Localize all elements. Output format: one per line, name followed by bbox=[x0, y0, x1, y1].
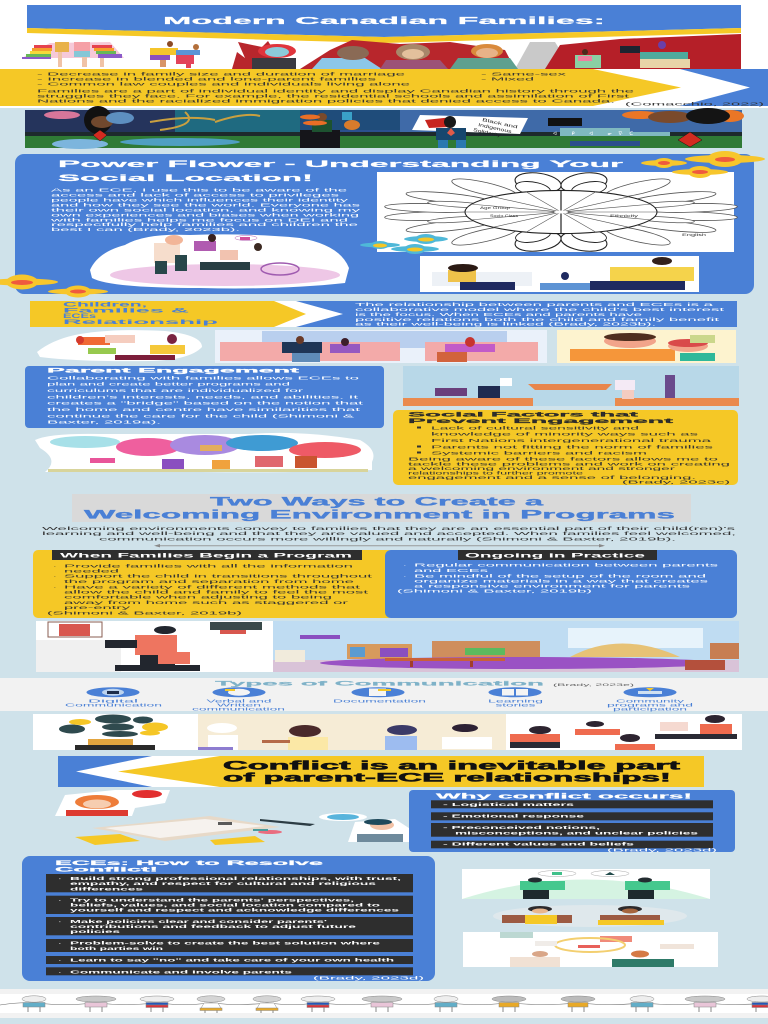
text: social location reflection: As an ECE, I use this to be aware of the bbox=[51, 188, 348, 194]
panel: Why conflict occurs bbox=[409, 790, 735, 854]
panel: When Families Begin a Program: - bbox=[54, 564, 56, 569]
panel: How to Resolve Conflict: both parties win bbox=[70, 946, 163, 952]
heading: Power Flower: Social Location! bbox=[58, 173, 313, 184]
banner: family trends and history: - Common law couples and individuals living alone bbox=[37, 82, 411, 88]
panel: When Families Begin a Program: Support the child in transitions throughout bbox=[64, 574, 374, 580]
heading: Types of Communication: Types of Communication bbox=[215, 681, 544, 688]
panel: Why conflict occurs: (Brady, 2023d) bbox=[607, 848, 718, 854]
heading: Two Ways to Create a Welcoming Environment: Two Ways to Create a bbox=[210, 496, 545, 508]
panel: Social Factors: Lack of cultural sensitivity and bbox=[431, 425, 640, 431]
icon: yellow flowers top right bbox=[641, 151, 765, 178]
panel: When Families Begin a Program: When Families Begin a Program bbox=[60, 552, 353, 560]
panel: Social Factors: Social Factors that bbox=[408, 411, 641, 418]
panel: Parent Engagement: Collaborating with families allows ECEs to bbox=[47, 375, 360, 381]
panel: Social Factors: Systemic barriers and racism bbox=[431, 450, 647, 456]
panel: Ongoing in Practice: Regular communication between parents bbox=[414, 563, 720, 569]
illustration: two people with puzzle pieces bbox=[493, 905, 687, 927]
illustration: group collaboration bbox=[506, 714, 742, 750]
panel: Parent Engagement: children's interests, needs, and abilities. It bbox=[47, 394, 360, 400]
banner: Children, Families & ECEs Relationship: The relationship between parents and ECEs is a bbox=[355, 302, 714, 308]
panel: When Families Begin a Program bbox=[33, 550, 393, 618]
banner: family trends and history: - Mixed bbox=[481, 76, 535, 82]
banner: Children, Families & ECEs Relationship: Families & bbox=[63, 308, 192, 314]
panel: Parent Engagement: curriculums that are individualized for bbox=[47, 388, 304, 394]
text: welcoming environments intro: communication occurs more willingly and naturally (Shimoni & Baxter, 2019b). bbox=[99, 536, 676, 542]
panel: Why conflict occurs: - Preconceived notions, bbox=[443, 825, 602, 831]
panel: How to Resolve Conflict: - bbox=[59, 877, 61, 882]
illustration: diverse Canadian families bbox=[22, 34, 741, 69]
icon: verbal and written: communication bbox=[192, 706, 287, 711]
title banner bbox=[27, 5, 741, 43]
panel: Types of Communication bbox=[0, 678, 768, 711]
illustration: bridge building bbox=[403, 366, 739, 406]
panel: How to Resolve Conflict: - bbox=[59, 920, 61, 925]
icon: verbal and written: Verbal and bbox=[206, 699, 274, 704]
panel: Ongoing in Practice: - bbox=[404, 574, 406, 579]
panel: When Families Begin a Program: Have a variety of different methods that bbox=[64, 584, 362, 590]
panel: Ongoing in Practice: a responsive environment for parents bbox=[414, 584, 692, 590]
panel: Why conflict occurs: - Emotional response bbox=[443, 814, 585, 820]
panel: Ongoing in Practice: and ECEs bbox=[414, 568, 490, 574]
panel: Why conflict occurs: - Logistical matters bbox=[443, 802, 575, 808]
illustration: Indigenous art mural: Indigenous bbox=[478, 122, 513, 134]
panel: Social Factors: engagement and a sense of belonging. bbox=[408, 475, 696, 481]
illustration: two colleagues talking bbox=[462, 869, 710, 899]
banner: family trends and history: struggles they face. For example, the residential schools and assimilation of First bbox=[37, 94, 631, 100]
panel: How to Resolve Conflict: contributions and feedback to adjust future bbox=[70, 924, 357, 930]
arrow: double-headed divider bbox=[154, 544, 605, 547]
panel: Parent Engagement: Baxter, 2019a). bbox=[47, 420, 161, 426]
panel: Why conflict occurs: misconceptions, and unclear policies bbox=[455, 830, 699, 836]
panel: How to Resolve Conflict: Make policies clear and consider parents' bbox=[70, 919, 327, 925]
heading: Types of Communication bbox=[215, 681, 636, 688]
illustration: family meeting on sofas bbox=[215, 330, 547, 363]
panel: Parent Engagement: the home and centre have similarities that bbox=[47, 407, 362, 413]
banner: Children, Families & ECEs Relationship: as their well-being is linked (Brady, 2023b). bbox=[355, 322, 656, 328]
panel: Parent Engagement: creates a "bridge" based on the notion that bbox=[47, 401, 365, 407]
panel: When Families Begin a Program: (Shimoni & Baxter, 2019b) bbox=[47, 610, 243, 616]
panel: How to Resolve Conflict: - bbox=[59, 959, 61, 964]
banner: Conflict is inevitable: of parent-ECE relationships! bbox=[223, 773, 671, 785]
panel: How to Resolve Conflict: - bbox=[59, 942, 61, 947]
title banner: Modern Canadian Families: bbox=[163, 15, 605, 27]
panel: Social Factors: Being aware of these factors allows me to bbox=[408, 456, 719, 462]
text: social location reflection: own experiences and biases when working bbox=[51, 212, 360, 218]
banner: Children, Families & ECEs Relationship: Relationship bbox=[63, 320, 219, 326]
panel: How to Resolve Conflict bbox=[22, 856, 435, 982]
heading: Two Ways to Create a Welcoming Environment: Welcoming Environment in Programs bbox=[84, 510, 675, 522]
icon: digital communication: Digital bbox=[88, 699, 138, 704]
illustration: row of children holding hands bbox=[0, 989, 768, 1018]
panel: When Families Begin a Program: allow the child and family to feel the most bbox=[64, 590, 370, 596]
panel: How to Resolve Conflict: yourself and respect and acknowledge differences bbox=[70, 908, 400, 914]
panel: Social Factors: relationships to further promote bbox=[408, 470, 584, 476]
text: welcoming environments intro bbox=[42, 526, 737, 542]
icon: verbal and written bbox=[192, 687, 287, 711]
panel: Ongoing in Practice: Be mindful of the setup of the room and bbox=[414, 573, 707, 579]
icon: documentation: Documentation bbox=[333, 699, 428, 704]
panel: Ongoing in Practice: (Shimoni & Baxter, 2019b) bbox=[397, 589, 593, 595]
banner: family trends and history: - Same-sex bbox=[481, 72, 568, 78]
illustration: parents with child on floor bbox=[420, 256, 699, 292]
panel: How to Resolve Conflict: ECEs: How to Resolve bbox=[55, 861, 326, 867]
illustration: family with wheelchair bbox=[90, 234, 349, 288]
panel: When Families Begin a Program: comfortable when adjusting to being bbox=[64, 595, 333, 601]
panel: How to Resolve Conflict: Try to understand the parents' perspectives, bbox=[70, 897, 356, 903]
illustration: social media bbox=[33, 714, 198, 750]
text: social location reflection: best I can (Brady, 2023b). bbox=[51, 227, 240, 233]
panel: Ongoing in Practice: Ongoing in Practice bbox=[465, 552, 646, 560]
panel: How to Resolve Conflict: empathy, and respect for cultural and religious bbox=[70, 881, 377, 887]
illustration: parents and children playing bbox=[37, 330, 202, 361]
chart: power flower diagram: Socio Class bbox=[490, 213, 518, 218]
panel: Social Factors: Prevent Engagement bbox=[408, 418, 676, 425]
icon: blue flowers bbox=[360, 234, 448, 254]
illustration: desk with calendar bbox=[75, 816, 315, 845]
panel: Social Factors: tackle these problems and work on creating bbox=[408, 461, 731, 467]
panel: How to Resolve Conflict: Communicate and involve parents bbox=[70, 969, 293, 975]
banner: Children, Families & ECEs Relationship bbox=[30, 301, 737, 328]
banner: family trends and history bbox=[0, 69, 768, 108]
panel: When Families Begin a Program: Provide families with all the information bbox=[64, 563, 354, 569]
icon: digital communication bbox=[65, 687, 164, 708]
illustration: Indigenous art mural: Black and bbox=[482, 117, 519, 130]
icon: learning stories: Learning bbox=[488, 699, 545, 704]
icon: learning stories: stories bbox=[496, 702, 536, 708]
icon: yellow flowers bottom left bbox=[0, 274, 108, 298]
text: social location reflection: their own social location, and knowing my bbox=[51, 208, 362, 214]
panel: How to Resolve Conflict: beliefs, values, and social location compared to bbox=[70, 902, 380, 908]
chart: power flower diagram: English bbox=[682, 232, 706, 237]
panel: How to Resolve Conflict: (Brady, 2023d) bbox=[313, 976, 425, 982]
panel: Parent Engagement: Parent Engagement bbox=[47, 369, 299, 375]
panel: How to Resolve Conflict: differences bbox=[70, 886, 144, 892]
banner: Conflict is inevitable bbox=[58, 756, 704, 787]
illustration: children's dream clouds bbox=[35, 433, 374, 472]
banner: family trends and history: - Decrease in family size and duration of marriage bbox=[37, 72, 406, 78]
panel: Ongoing in Practice: organize materials in a way that creates bbox=[414, 579, 710, 585]
banner: family trends and history: Nations and the racialized immigration policies that denied access to Canada. bbox=[37, 99, 615, 105]
chart: power flower diagram bbox=[377, 172, 740, 252]
panel: Ongoing in Practice: - bbox=[404, 564, 406, 569]
banner: Children, Families & ECEs Relationship: collaborative model where the child's best interest bbox=[355, 307, 726, 313]
panel: How to Resolve Conflict: - bbox=[59, 970, 61, 975]
text: welcoming environments intro: Welcoming environments convey to families that they are an essential part of their child(ren)'s bbox=[42, 526, 737, 532]
illustration: parent and children reading bbox=[557, 330, 736, 363]
banner: family trends and history: - Increase in blended and lone-parent families bbox=[37, 76, 378, 82]
illustration: mother and child walking bbox=[36, 621, 273, 672]
banner: Children, Families & ECEs Relationship: positive relations both the child and family benefit bbox=[355, 317, 721, 323]
icon: community programs: Community bbox=[616, 699, 687, 704]
panel: How to Resolve Conflict: Build strong professional relationships, with trust, bbox=[70, 876, 403, 882]
panel: Parent Engagement bbox=[25, 366, 384, 428]
illustration: Indigenous art mural bbox=[25, 106, 744, 149]
text: social location reflection: people have which influences their identity bbox=[51, 198, 350, 204]
illustration: feedback exchange bbox=[463, 932, 718, 967]
banner: Children, Families & ECEs Relationship: is the focus. When ECEs and parents have bbox=[355, 312, 643, 318]
illustration: upset woman bbox=[55, 790, 170, 816]
panel: Ongoing in Practice bbox=[385, 550, 737, 618]
text: social location reflection: and how they see the world. Everyone has bbox=[51, 202, 362, 208]
icon: verbal and written: Written bbox=[217, 702, 263, 708]
heading: Types of Communication: (Brady, 2023e) bbox=[553, 682, 636, 687]
panel: Parent Engagement: plan and create better programs and bbox=[47, 382, 291, 388]
panel: Social Factors: Parents not fitting the norm of families bbox=[431, 444, 715, 450]
text: social location reflection bbox=[51, 188, 362, 233]
illustration: people talking bbox=[198, 714, 506, 750]
panel: Power Flower bbox=[0, 151, 765, 298]
panel: How to Resolve Conflict: policies bbox=[70, 929, 121, 935]
panel: How to Resolve Conflict: - bbox=[59, 898, 61, 903]
panel: When Families Begin a Program: the program and separation from home bbox=[64, 579, 355, 585]
banner: Conflict is inevitable: Conflict is an inevitable part bbox=[223, 760, 680, 772]
heading: Power Flower: Power Flower - Understanding Your bbox=[58, 159, 624, 170]
panel: Social Factors: knowledge of minority ways such as bbox=[431, 431, 700, 437]
icon: community programs: programs and bbox=[607, 702, 695, 708]
panel: Parent Engagement: continue the care for the child (Shimoni & bbox=[47, 413, 357, 419]
banner: family trends and history: Families are a part of individual identity and display Canadian history through the bbox=[37, 89, 635, 95]
heading: Two Ways to Create a Welcoming Environment bbox=[72, 494, 691, 522]
panel: Why conflict occurs: Why conflict occurs! bbox=[436, 793, 692, 800]
text: social location reflection: respectfully help families and children the bbox=[51, 222, 359, 228]
icon: community programs: participation bbox=[613, 706, 689, 711]
panel: Social Factors: (Brady, 2023c) bbox=[622, 479, 731, 485]
panel: Social Factors: a welcoming environment and stronger bbox=[408, 466, 676, 472]
illustration: Indigenous art mural: ᐊ ᑭ ᐊ ᓂᐍᑕ bbox=[553, 131, 633, 137]
text: social location reflection: access and lack of access to privileges bbox=[51, 192, 341, 198]
panel: How to Resolve Conflict: Learn to say "no" and take care of your own health bbox=[70, 958, 394, 964]
panel: When Families Begin a Program: - bbox=[54, 585, 56, 590]
text: social location reflection: with families helps me focus on DEI and bbox=[51, 217, 349, 223]
illustration: classroom bbox=[273, 621, 739, 672]
panel: Social Factors: First Nations intergenerational trauma bbox=[431, 438, 712, 444]
banner: Children, Families & ECEs Relationship: Children, bbox=[63, 303, 148, 309]
icon: learning stories bbox=[488, 687, 545, 708]
panel: Social Factors bbox=[393, 410, 738, 485]
illustration: upset boy bbox=[319, 813, 418, 842]
banner: family trends and history: (Comacchio, 2022) bbox=[625, 102, 765, 108]
heading: Power Flower bbox=[58, 159, 624, 184]
panel: How to Resolve Conflict: Conflict! bbox=[55, 868, 158, 874]
panel: When Families Begin a Program: away from home such as staggered or bbox=[64, 600, 349, 606]
panel: When Families Begin a Program: pre-entry bbox=[64, 605, 132, 611]
icon: community programs bbox=[607, 687, 695, 711]
panel: When Families Begin a Program: needed bbox=[64, 568, 120, 574]
text: welcoming environments intro: learning and well-being and that they are valued and accepted. When families feel welcomed, bbox=[42, 531, 736, 537]
illustration: Indigenous art mural: Solidarity bbox=[473, 127, 502, 138]
chart: power flower diagram: Ethnicity bbox=[610, 213, 638, 218]
banner: Children, Families & ECEs Relationship: ECEs bbox=[63, 314, 97, 320]
icon: digital communication: Communication bbox=[65, 702, 164, 708]
icon: documentation bbox=[333, 687, 428, 704]
panel: How to Resolve Conflict: Problem-solve to create the best solution where bbox=[70, 941, 381, 947]
panel: When Families Begin a Program: - bbox=[54, 575, 56, 580]
chart: power flower diagram: Age Group bbox=[480, 205, 511, 210]
panel: Why conflict occurs: - Different values and beliefs bbox=[443, 842, 635, 848]
